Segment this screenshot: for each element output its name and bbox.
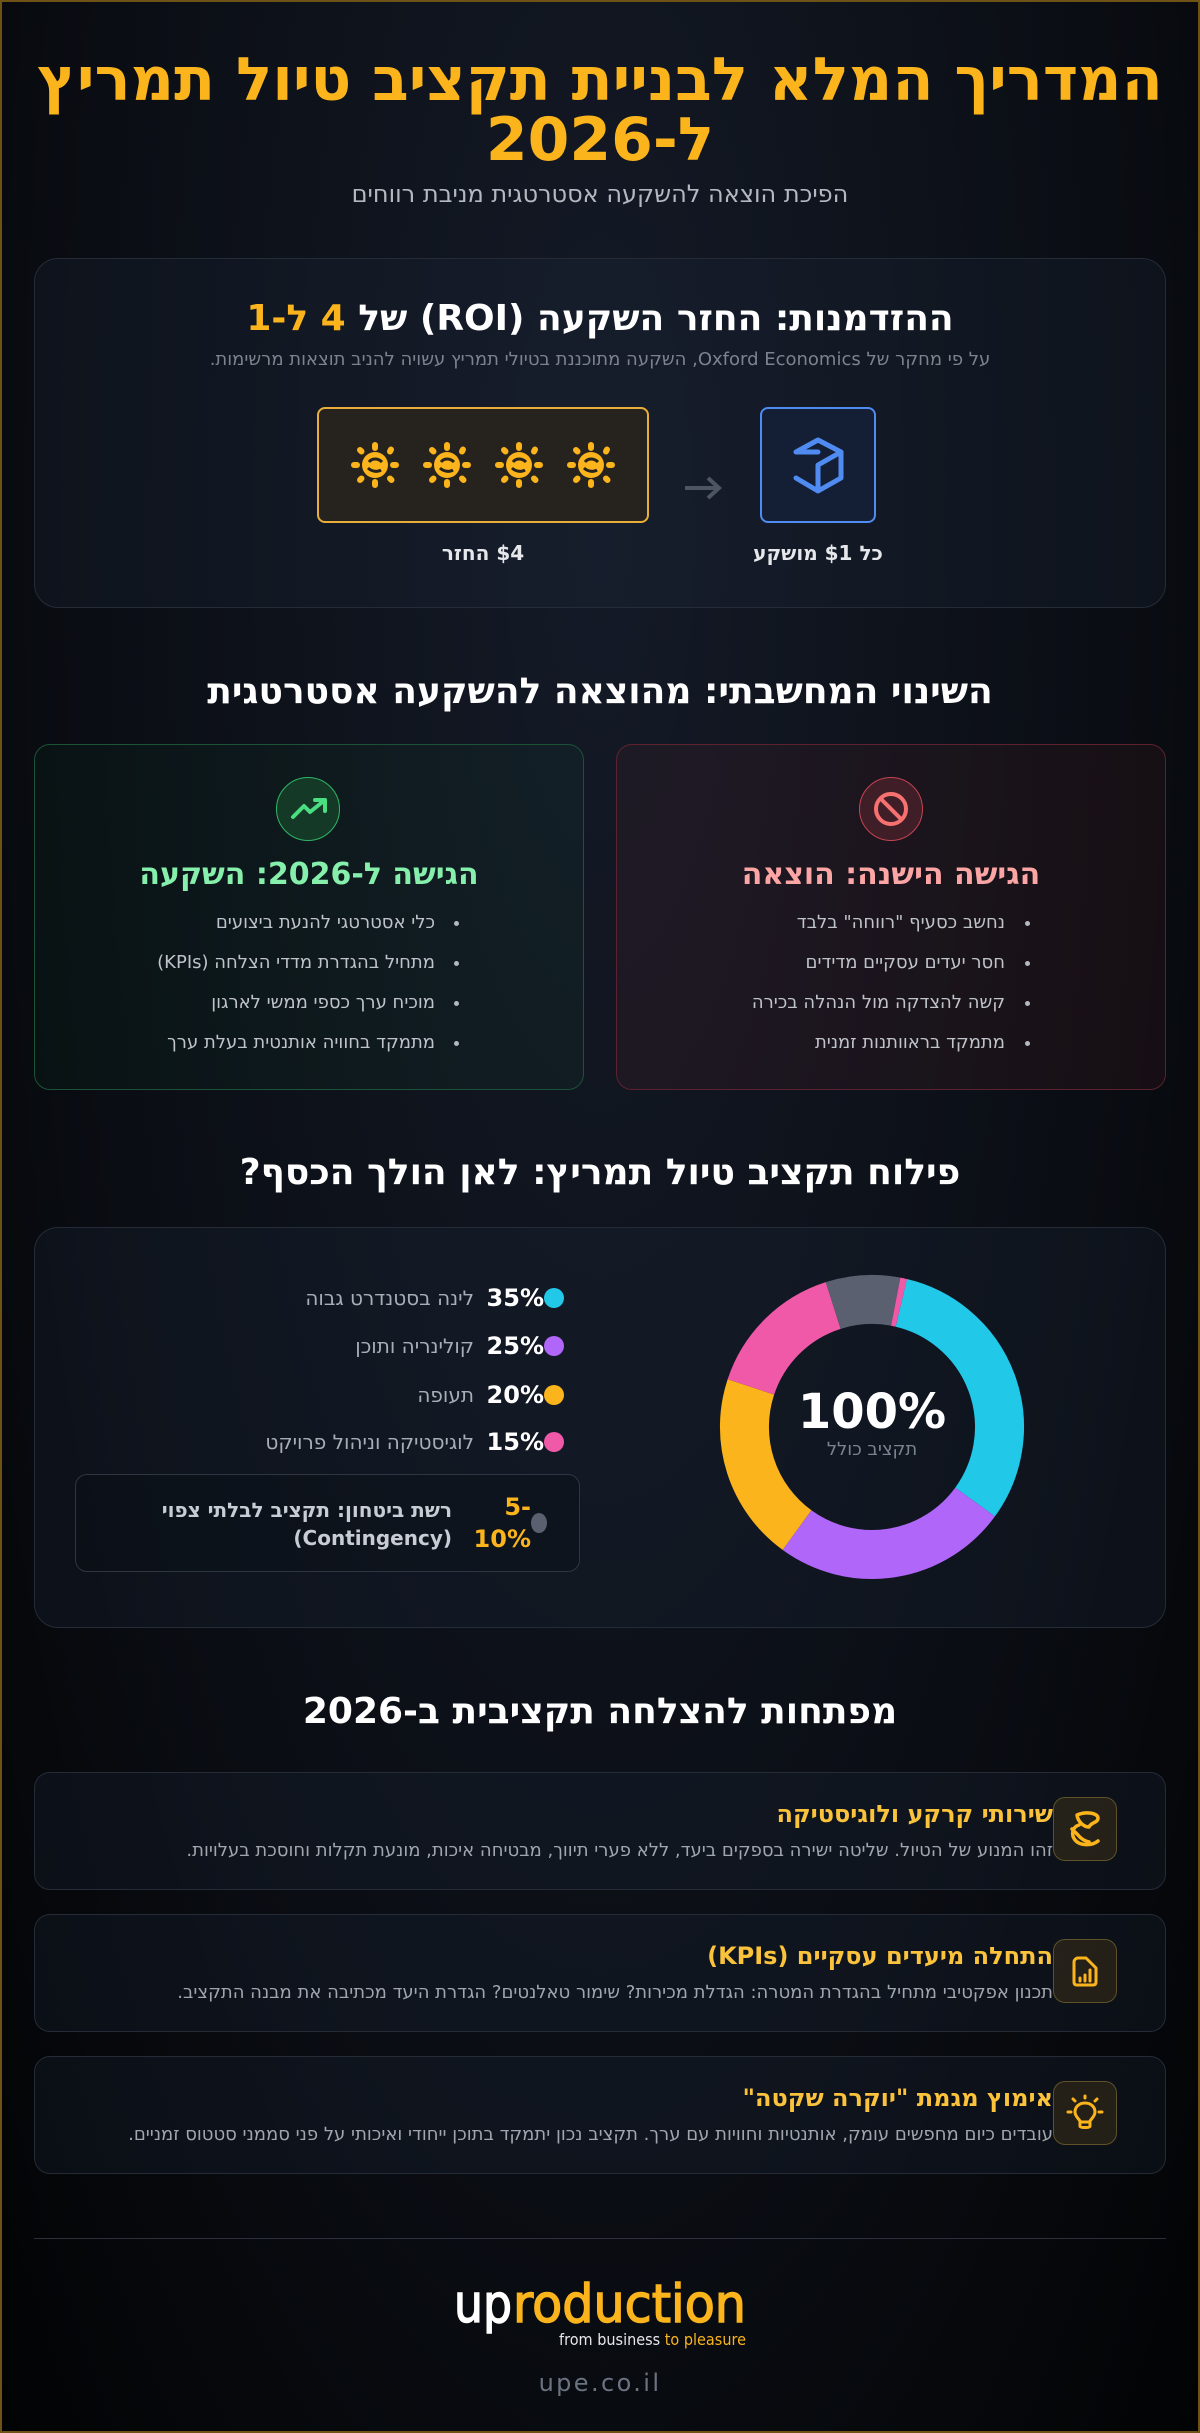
- callout box: contingency: [75, 1474, 580, 1572]
- ROI source note: על פי מחקר של Oxford Economics, השקעה מתוכננת בטיולי תמריץ עשויה להניב תוצאות מרשימות.: [210, 349, 990, 370]
- legend label: lodging: לינה בסטנדרט גבוה: [305, 1286, 474, 1310]
- box: one dollar invested: [760, 407, 876, 523]
- legend value: flights: 20%: [487, 1381, 544, 1409]
- panel: new approach: [34, 744, 584, 1090]
- bullet: [1025, 961, 1030, 966]
- bullet: [1025, 1041, 1030, 1046]
- card text: ground services: זהו המנוע של הטיול. שליטה ישירה בספקים ביעד, ללא פערי תיווך, מבטיחה איכות, מונעת תקלות וחוסכת בעלויות.: [186, 1840, 1053, 1861]
- heading: keys to success: מפתחות להצלחה תקציבית ב-2026: [303, 1691, 897, 1732]
- icon: cube: [794, 438, 844, 494]
- title: המדריך המלא לבניית תקציב טיול תמריץ: [37, 45, 1163, 115]
- contingency label: רשת ביטחון: תקציב לבלתי צפוי: [162, 1498, 452, 1522]
- bullet: [454, 1001, 459, 1006]
- panel: budget allocation: [34, 1227, 1166, 1628]
- label: invested: כל $1 מושקע: [753, 541, 883, 565]
- box: four dollar return with coin icons: [317, 407, 649, 523]
- legend value: logistics: 15%: [487, 1428, 544, 1456]
- icon: light bulb: [1066, 2094, 1104, 2129]
- list item 3: מוכיח ערך כספי ממשי לארגון: [211, 992, 435, 1013]
- bullet: [1025, 921, 1030, 926]
- card text: quiet luxury: עובדים כיום מחפשים עומק, אותנטיות וחוויות עם ערך. תקציב נכון יתמקד בתוכן ייחודי ואיכותי על פני סממני סטטוס זמניים.: [128, 2124, 1053, 2145]
- donut centre label: תקציב כולל: [827, 1439, 917, 1460]
- card title: quiet luxury: אימוץ מגמת "יוקרה שקטה": [742, 2084, 1053, 2112]
- arrow: [685, 476, 722, 500]
- icon: chart file: [1072, 1956, 1098, 1986]
- bullet: [1025, 1001, 1030, 1006]
- panel: quiet luxury: [34, 2056, 1166, 2174]
- new approach list: כלי אסטרטגי להנעת ביצועים: [216, 912, 435, 933]
- contingency label: [162, 1498, 452, 1550]
- title: ל-2026: [486, 105, 714, 175]
- ROI heading: ההזדמנות: החזר השקעה (ROI) של 4 ל-1: [246, 298, 954, 339]
- contingency label: (Contingency): [293, 1526, 452, 1550]
- legend value: culinary: 25%: [487, 1332, 544, 1360]
- subtitle: הפיכת הוצאה להשקעה אסטרטגית מניבת רווחים: [352, 180, 848, 208]
- bullet: [454, 1041, 459, 1046]
- legend dot: flights: [544, 1385, 564, 1405]
- legend label: culinary: קולינריה ותוכן: [355, 1334, 474, 1358]
- panel: ground services: [34, 1772, 1166, 1890]
- donut chart: [720, 1274, 1024, 1579]
- panel: ROI opportunity: [34, 258, 1166, 608]
- list item 3: קשה להצדקה מול הנהלה בכירה: [752, 992, 1005, 1013]
- new approach heading: הגישה ל-2026: השקעה: [139, 857, 479, 892]
- old approach heading: הגישה הישנה: הוצאה: [742, 857, 1040, 892]
- icon: ban: [859, 777, 923, 841]
- panel: old approach: [616, 744, 1166, 1090]
- list item 4: מתמקד בחוויה אותנטית בעלת ערך: [167, 1032, 435, 1053]
- icon box: quiet luxury: [1053, 2081, 1117, 2145]
- legend value: lodging: 35%: [487, 1284, 544, 1312]
- icon: globe hand: [1070, 1811, 1100, 1846]
- label: return: $4 החזר: [442, 541, 524, 565]
- list item 2: חסר יעדים עסקיים מדידים: [806, 952, 1005, 973]
- panel: business goals: [34, 1914, 1166, 2032]
- title: [37, 45, 1163, 175]
- legend dot: culinary: [544, 1336, 564, 1356]
- logo: uproduction: [454, 2274, 746, 2349]
- donut centre value: 100%: [798, 1384, 946, 1440]
- contingency value: 5-10%: [474, 1493, 531, 1553]
- logo: uproduction: up: [454, 2274, 512, 2335]
- legend label: flights: תעופה: [417, 1383, 474, 1407]
- bullet: [454, 921, 459, 926]
- footer divider: [34, 2238, 1166, 2239]
- bullet: [454, 961, 459, 966]
- legend label: logistics: לוגיסטיקה וניהול פרויקט: [265, 1430, 474, 1454]
- icon: trending up: [276, 777, 340, 841]
- heading: mindset shift: השינוי המחשבתי: מהוצאה להשקעה אסטרטגית: [207, 671, 993, 712]
- card text: business goals: תכנון אפקטיבי מתחיל בהגדרת המטרה: הגדלת מכירות? שימור טאלנטים? הגדרת היעד מכתיבה את מבנה התקציב.: [177, 1982, 1053, 2003]
- logo: uproduction: roduction: [513, 2274, 746, 2335]
- legend dot: logistics: [544, 1432, 564, 1452]
- logo: uproduction: from business to pleasure: [559, 2330, 746, 2349]
- icon box: ground services: [1053, 1797, 1117, 1861]
- list item 4: מתמקד בראוותנות זמנית: [815, 1032, 1005, 1053]
- list item 2: מתחיל בהגדרת מדדי הצלחה (KPIs): [157, 952, 435, 973]
- website url: upe.co.il: [539, 2369, 661, 2397]
- contingency dot: [531, 1513, 547, 1533]
- legend dot: lodging: [544, 1288, 564, 1308]
- old approach list: נחשב כסעיף "רווחה" בלבד: [797, 912, 1005, 933]
- icon box: business goals: [1053, 1939, 1117, 2003]
- heading: budget allocation: פילוח תקציב טיול תמריץ: לאן הולך הכסף?: [240, 1152, 960, 1193]
- card title: ground services: שירותי קרקע ולוגיסטיקה: [776, 1800, 1053, 1828]
- card title: business goals: התחלה מיעדים עסקיים (KPIs): [707, 1942, 1053, 1970]
